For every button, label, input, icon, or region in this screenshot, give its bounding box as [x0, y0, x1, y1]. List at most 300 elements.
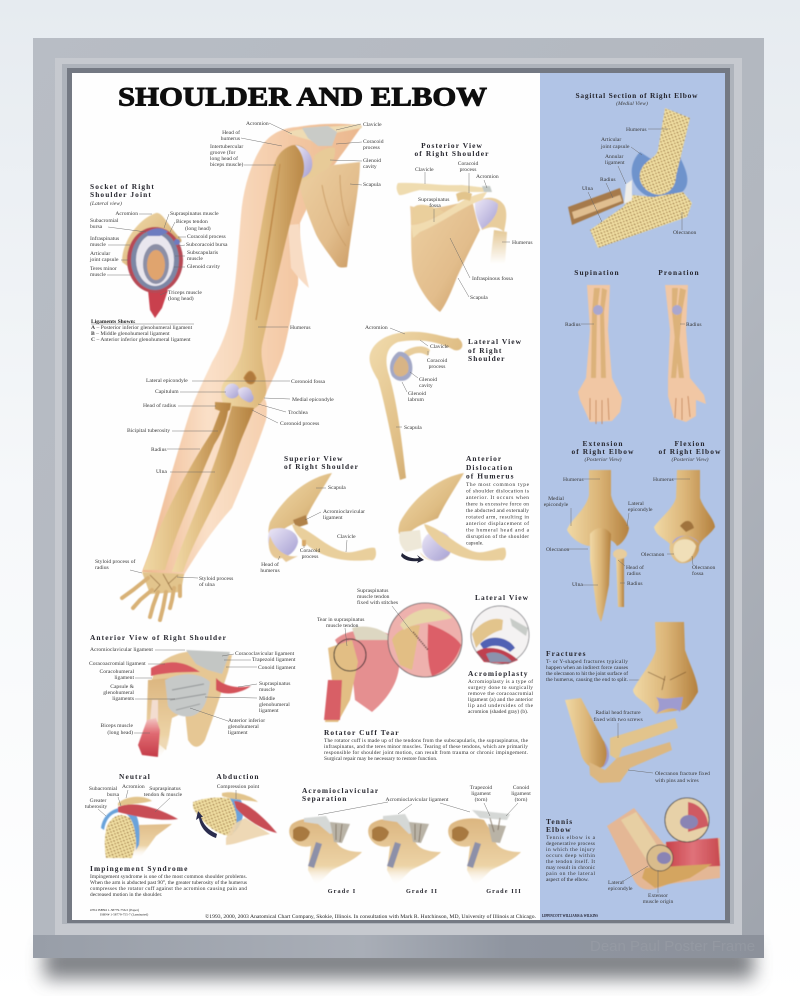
footer credits: ISBN# 1-58779-755-7 (Laminated) [100, 912, 148, 916]
extension labels: Ulna [572, 582, 583, 588]
heading: Socket of Right [90, 182, 155, 191]
posterior labels: Infraspinous fossa [472, 275, 513, 282]
socket labels: Acromion [115, 211, 138, 217]
heading: flexion: of Right Elbow [658, 447, 722, 456]
triceps fold [288, 224, 309, 288]
heading: flexion: Flexion [674, 439, 706, 448]
heading: impingement: Impingement Syndrome [90, 864, 188, 873]
arm labels and leaders: groove (for [210, 149, 235, 156]
fractures text: the humerus, causing the end to split. [546, 677, 628, 683]
arm labels and leaders: Coronoid fossa [291, 378, 326, 385]
radius labels: Radius [565, 322, 581, 328]
acromioplasty text [468, 678, 534, 715]
acromioplasty text: Acromioplasty is a type of [468, 678, 533, 685]
panel: acromioplasty [468, 593, 534, 715]
coracoid and glenoid [302, 147, 335, 182]
humeral head cartilage [295, 145, 312, 178]
socket labels: Supraspinatus muscle [170, 211, 219, 217]
heading [576, 91, 698, 107]
blue side panel [540, 73, 725, 920]
superior labels [260, 485, 365, 574]
footer credits: ©1993, 2000, 2003 Anatomical Chart Company, Skokie, Illinois. In consultation with Mark R. Hutchinson, MD, University of Illinois at Chicago. [205, 914, 536, 920]
fracture labels: with pins and wires [655, 778, 699, 784]
arm labels and leaders: of ulna [199, 581, 215, 588]
impingement text: compresses the rotator cuff against the acromion causing pain and [90, 885, 247, 892]
posterior labels: fossa [429, 202, 441, 209]
acromioplasty text: surgery done to surgically [468, 685, 533, 691]
footer credits: #704 ISBN# 1-58779-756-5 (Paper) [90, 908, 139, 912]
acromioplasty text: ligament (a) and the anterior [468, 696, 533, 703]
heading [90, 182, 155, 207]
neutral labels: bursa [107, 792, 120, 798]
anterior labels: (long head) [107, 729, 133, 736]
watermark: Dean Paul Poster Frame [590, 938, 755, 955]
extension labels: Head of [626, 564, 644, 571]
grade labels: Grade I [328, 888, 356, 895]
superior labels: humerus [260, 568, 280, 574]
tennis labels: epicondyle [608, 886, 633, 892]
heading: Shoulder [468, 354, 506, 363]
neutral labels: Supraspinatus [149, 786, 181, 792]
illustration: scapula posterior [397, 183, 507, 312]
sagittal labels: ligament [605, 160, 625, 166]
sagittal labels: Humerus [626, 127, 647, 133]
heading: Separation [302, 794, 348, 803]
heading: neutral: Neutral [119, 772, 151, 781]
dislocation text: The most common type [466, 482, 530, 488]
sagittal labels: joint capsule [600, 144, 630, 150]
arm labels and leaders: Bicipital tuberosity [127, 428, 170, 434]
rotator labels: fixed with stitches [357, 599, 398, 606]
superior labels: ligament [323, 515, 343, 521]
extension labels: Olecranon [641, 552, 664, 558]
neutral labels: Subacromial [89, 786, 118, 792]
neutral labels: tendon & muscle [144, 792, 183, 798]
arm labels and leaders: Clavicle [363, 122, 382, 128]
illustration: tennis elbow [607, 798, 720, 890]
tennis text: aspect of the elbow. [546, 876, 589, 883]
extension labels: epicondyle [628, 507, 653, 513]
arm labels and leaders: Styloid process [199, 576, 233, 582]
anterior labels: Capsule & [110, 684, 135, 690]
panel: anterior view of right shoulder [89, 633, 296, 760]
anterior labels: muscle [259, 687, 275, 693]
extension labels: epicondyle [544, 502, 569, 508]
illustration: pronated forearm [665, 285, 706, 422]
anterior labels: ligament [114, 675, 134, 681]
posterior labels: process [460, 167, 476, 173]
panel: socket of right shoulder joint [89, 182, 228, 343]
sagittal labels [582, 127, 696, 236]
arm labels and leaders: Glenoid [363, 158, 381, 164]
arm silhouette [142, 124, 362, 578]
heading: of Humerus [466, 472, 515, 480]
arm labels and leaders: Coracoid [363, 139, 384, 145]
dislocation text: the humeral head and a [466, 528, 530, 534]
separation labels: Trapezoid [470, 785, 492, 791]
heading: Elbow [546, 825, 572, 834]
radius [143, 402, 231, 570]
lateral labels: Coracoid [427, 358, 447, 364]
heading: Tennis [546, 817, 573, 826]
neutral labels: Greater [90, 798, 107, 804]
heading: pronation: Pronation [658, 268, 700, 277]
tennis text: the tendon itself. It [546, 858, 596, 865]
tennis text [546, 835, 596, 883]
panel: supination and pronation [565, 268, 706, 424]
rotator labels: muscle tendon [357, 594, 390, 600]
heading: acromioplasty: Acromioplasty [468, 669, 529, 678]
socket labels: Articular [90, 251, 110, 257]
anterior labels: Supraspinatus [259, 681, 290, 687]
arm labels and leaders: Humerus [290, 325, 311, 331]
panel: posterior view of right shoulder [397, 141, 533, 312]
extension labels: radius [627, 571, 641, 577]
rotator text: Surgical repair may be necessary to restore function. [324, 755, 437, 762]
neutral labels [85, 784, 183, 816]
dislocation text [466, 482, 530, 546]
heading [284, 454, 359, 471]
heading: Shoulder Joint [90, 190, 152, 199]
radius labels: Radius [686, 322, 702, 328]
dislocation text: disruption of the shoulder [466, 533, 529, 540]
arm labels and leaders: cavity [363, 164, 377, 170]
heading: extension: Extension [582, 439, 624, 448]
heading: Acromioclavicular [302, 786, 379, 795]
dislocation text: rotated arm, resulting in [466, 514, 529, 520]
frame drop shadow [44, 945, 754, 979]
shoulder ligaments [302, 126, 337, 146]
anterior labels: ligament [259, 708, 279, 714]
arm labels and leaders: long head of [210, 155, 238, 162]
anterior labels [89, 647, 296, 736]
panel: superior view of right shoulder [260, 454, 376, 574]
separation labels: Acromioclavicular ligament [386, 797, 449, 803]
heading: flexion [658, 439, 722, 463]
extension labels: Humerus [653, 477, 674, 483]
footer credits: LIPPINCOTT WILLIAMS & WILKINS [542, 913, 598, 918]
rotator labels [317, 588, 412, 646]
heading [468, 337, 522, 363]
ligaments key [91, 319, 194, 343]
tennis labels: muscle origin [643, 899, 674, 905]
tennis labels: Lateral [608, 880, 624, 886]
tennis text: in which the injury [546, 847, 595, 853]
extension labels: Lateral [628, 501, 644, 507]
arm labels and leaders: Capitulum [155, 389, 179, 395]
heading [466, 454, 515, 480]
illustration: anterior shoulder [138, 650, 251, 760]
heading: Sagittal Section of Right Elbow [576, 91, 698, 100]
tennis text: pain on the lateral [546, 871, 596, 877]
posterior labels: Scapula [470, 295, 488, 301]
arrow: abduction movement [196, 811, 217, 838]
clavicle [287, 124, 362, 141]
neutral labels: Acromion [122, 784, 145, 790]
illustration: lateral circle [471, 606, 529, 664]
fractures text [546, 658, 660, 683]
socket labels: bursa [90, 224, 103, 230]
rotator text: infraspinatus, and the teres minor muscles. Tearing of these tendons, which are primarily [324, 743, 528, 750]
illustration: rotator cuff [324, 603, 462, 722]
carpal bones and hand [122, 572, 184, 620]
separation labels: (torn) [515, 796, 527, 803]
illustration: grade II [368, 814, 441, 886]
arm labels and leaders: Medial epicondyle [292, 397, 334, 403]
dislocation text: capsule. [466, 540, 484, 546]
tennis text: Tennis elbow is a [546, 835, 596, 841]
ligaments key: A – Posterior inferior glenohumeral ligament [91, 324, 193, 331]
heading: supination: Supination [574, 268, 620, 277]
heading: flexion: (Posterior View) [671, 456, 709, 463]
arm labels and leaders: Radius [151, 447, 167, 453]
posterior labels: Humerus [512, 240, 533, 246]
tennis text: degenerative process [546, 841, 595, 847]
panel: lateral view of right shoulder [365, 325, 522, 480]
lateral labels: Clavicle [430, 344, 449, 350]
fractures text: T- or Y-shaped fractures typically [546, 658, 628, 665]
superior labels: Scapula [328, 485, 346, 491]
anterior labels: ligaments [112, 696, 134, 702]
illustration: fixed elbow [565, 698, 678, 783]
heading: extension: of Right Elbow [571, 447, 635, 456]
title: SHOULDER AND ELBOW [118, 82, 487, 112]
illustration: fractured humerus [633, 622, 698, 714]
ligaments key: C – Anterior inferior glenohumeral ligament [91, 336, 191, 343]
illustration: sagittal section [568, 108, 692, 248]
arm labels and leaders: Lateral epicondyle [146, 378, 188, 384]
illustration: supinated forearm [578, 285, 622, 424]
lateral labels: cavity [419, 383, 433, 389]
posterior labels: Coracoid [458, 161, 478, 167]
panel: tennis elbow [546, 798, 720, 905]
superior labels: Coracoid [300, 548, 320, 554]
arm labels and leaders: Acromion [246, 121, 269, 127]
extension labels [544, 477, 715, 588]
extension labels: fossa [692, 570, 704, 577]
heading: Lateral View [468, 337, 522, 346]
heading: Fractures [546, 649, 587, 658]
grade labels [328, 888, 522, 895]
heading: lateral view: Lateral View [475, 593, 529, 602]
lateral labels: Scapula [404, 425, 422, 431]
superior labels: Head of [261, 561, 279, 568]
elbow cartilage [224, 384, 240, 398]
separation labels: (torn) [475, 796, 487, 803]
sagittal labels: Radius [600, 177, 616, 183]
footer credits [90, 908, 598, 920]
heading: extension: (Posterior View) [584, 456, 622, 463]
anterior labels: Coracoacromial ligament [89, 661, 146, 667]
heading: (Lateral view) [90, 200, 122, 207]
illustration: grade III [448, 810, 521, 886]
arm labels and leaders: Ulna [156, 469, 167, 475]
grade labels: Grade III [486, 888, 522, 895]
separation labels [318, 785, 531, 816]
dislocation text: of shoulder dislocation is [466, 488, 529, 494]
heading [302, 786, 379, 803]
anterior labels: glenohumeral [259, 702, 290, 708]
socket labels: Glenoid cavity [187, 264, 220, 270]
panel: impingement syndrome [85, 772, 277, 898]
arrow: displacement [401, 553, 424, 563]
separation labels: Conoid [513, 785, 529, 791]
posterior labels: Acromion [476, 174, 499, 180]
anterior labels: glenohumeral [228, 724, 259, 730]
posterior labels: Supraspinatus [418, 197, 449, 203]
dislocation text: the abducted and externally [466, 508, 529, 514]
heading: Posterior View [421, 141, 483, 150]
posterior labels: Clavicle [415, 167, 434, 173]
heading: Dislocation [466, 463, 513, 472]
panel: anterior dislocation of humerus [398, 454, 530, 563]
arm labels and leaders: Styloid process of [95, 558, 136, 565]
arm labels and leaders: humerus [221, 136, 240, 142]
anterior labels: glenohumeral [103, 690, 134, 696]
socket labels: Teres minor [90, 266, 117, 272]
arm labels and leaders: Intertubercular [210, 144, 243, 150]
anterior labels: Coracohumeral [100, 669, 134, 675]
extension labels: Olecranon [692, 565, 715, 571]
arm labels and leaders: Scapula [363, 182, 381, 188]
dislocation text: anterior displacement of [466, 520, 529, 527]
illustration: superior view bones [268, 473, 376, 562]
panel: acromioclavicular separation [289, 785, 531, 895]
heading: extension [571, 439, 635, 463]
radius labels [565, 322, 702, 328]
anterior labels: Acromioclavicular ligament [90, 647, 153, 653]
heading [415, 141, 489, 158]
rotator labels: Supraspinatus [357, 588, 388, 594]
superior labels: Clavicle [337, 534, 356, 540]
panel: sagittal section of right elbow [568, 91, 698, 248]
heading: Rotator Cuff Tear [324, 728, 400, 737]
superior labels: process [302, 554, 318, 560]
illustration: flexed elbow [654, 470, 715, 563]
grade labels: Grade II [406, 888, 438, 895]
arm labels and leaders: Trochlea [288, 410, 308, 416]
acromioplasty text: acromion (shaded gray) (b). [468, 708, 528, 715]
illustration: extended elbow [567, 470, 629, 622]
sagittal labels: Ulna [582, 186, 593, 192]
socket labels: Subcoracoid bursa [186, 242, 228, 248]
poster sheet [72, 73, 540, 920]
trochlea [238, 387, 254, 402]
rotator text: The rotator cuff is made up of the tendons from the subscapularis, the supraspinatus, the [324, 737, 529, 744]
socket labels: Triceps muscle [168, 290, 202, 296]
heading: (Medial View) [616, 100, 648, 107]
socket labels: (long head) [185, 225, 211, 232]
extension labels: Medial [548, 496, 564, 502]
anterior labels: Coracoclavicular ligament [235, 651, 295, 657]
extension labels: Humerus [563, 477, 584, 483]
anterior labels: Conoid ligament [258, 665, 296, 671]
sagittal labels: Articular [601, 137, 621, 143]
panel: extension and flexion [544, 439, 722, 622]
shaft shading [244, 164, 280, 384]
socket labels: Coracoid process [187, 234, 226, 240]
anterior labels: Trapezoid ligament [252, 657, 296, 663]
rotator labels: muscle tendon [326, 623, 359, 629]
scapula [298, 162, 360, 268]
socket labels: Infraspinatus [90, 235, 119, 242]
fracture labels: Radial head fracture [595, 709, 641, 716]
lateral labels [365, 325, 449, 431]
arm labels and leaders: process [363, 145, 380, 151]
humerus [221, 145, 310, 410]
panel: rotator cuff tear [317, 588, 529, 762]
lateral labels: Glenoid [408, 391, 426, 397]
sagittal labels: Annular [605, 154, 623, 160]
tennis text: occurs deep within [546, 853, 595, 859]
separation labels: ligament [471, 791, 491, 797]
rotator text [324, 737, 529, 762]
fractures text: the olecranon to hit the joint surface of [546, 670, 628, 677]
anterior labels: Middle [259, 696, 276, 702]
socket labels: muscle [90, 242, 106, 248]
socket labels: muscle [90, 272, 106, 278]
ulna [172, 406, 254, 572]
tennis labels [608, 866, 674, 905]
socket labels [89, 211, 228, 302]
arm labels and leaders: biceps muscle) [210, 161, 244, 168]
socket labels: muscle [187, 256, 203, 262]
arm labels and leaders: Coronoid process [280, 421, 319, 427]
abduction label: Compression point [217, 784, 260, 790]
anterior labels: ligament [228, 730, 248, 736]
dislocation text: there is excessive force on [466, 500, 529, 508]
fracture labels [593, 709, 710, 784]
illustration: lateral scapula [369, 332, 462, 480]
tennis labels: Extensor [648, 893, 668, 899]
posterior labels [415, 161, 533, 301]
fracture labels: Olecranon fracture fixed [655, 770, 710, 777]
heading: abduction: Abduction [216, 772, 260, 781]
impingement text: When the arm is abducted past 90°, the greater tuberosity of the humerus [90, 879, 247, 886]
arm labels and leaders [95, 121, 384, 588]
socket labels: Subacromial [90, 218, 119, 224]
panel: fractures [546, 622, 710, 784]
separation labels: ligament [511, 791, 531, 797]
illustration: socket [122, 213, 183, 318]
impingement text [90, 873, 247, 898]
lateral labels: Acromion [365, 325, 388, 331]
impingement text: Impingement syndrome is one of the most common shoulder problems. [90, 873, 247, 880]
neutral labels: tuberosity [85, 804, 107, 810]
superior labels: Acromioclavicular [323, 509, 365, 515]
heading: of Right Shoulder [284, 462, 359, 471]
socket labels: joint capsule [89, 257, 119, 263]
abduction label [217, 784, 260, 799]
extension labels: Radius [627, 581, 643, 587]
tennis text: may result in chronic [546, 865, 596, 871]
ligaments key: Ligaments Shown: [91, 319, 136, 325]
heading [546, 817, 573, 834]
socket labels: (long head) [168, 295, 194, 302]
acromioplasty text: remove the coracoacromial [468, 691, 534, 697]
lateral labels: process [429, 364, 445, 370]
illustration: neutral [101, 797, 178, 858]
fracture labels: fixed with two screws [593, 716, 643, 723]
heading: Superior View [284, 454, 344, 463]
arm labels and leaders: radius [95, 565, 109, 571]
rotator text: responsible for shoulder joint motion, can result from trauma or chronic impingement. [324, 749, 528, 756]
extension labels: Olecranon [546, 547, 569, 553]
arm labels and leaders: Head of [222, 129, 240, 136]
illustration: anterior view of arm [95, 121, 384, 620]
rotator labels: Tear in supraspinatus [317, 617, 364, 623]
anterior labels: Biceps muscle [101, 723, 134, 729]
